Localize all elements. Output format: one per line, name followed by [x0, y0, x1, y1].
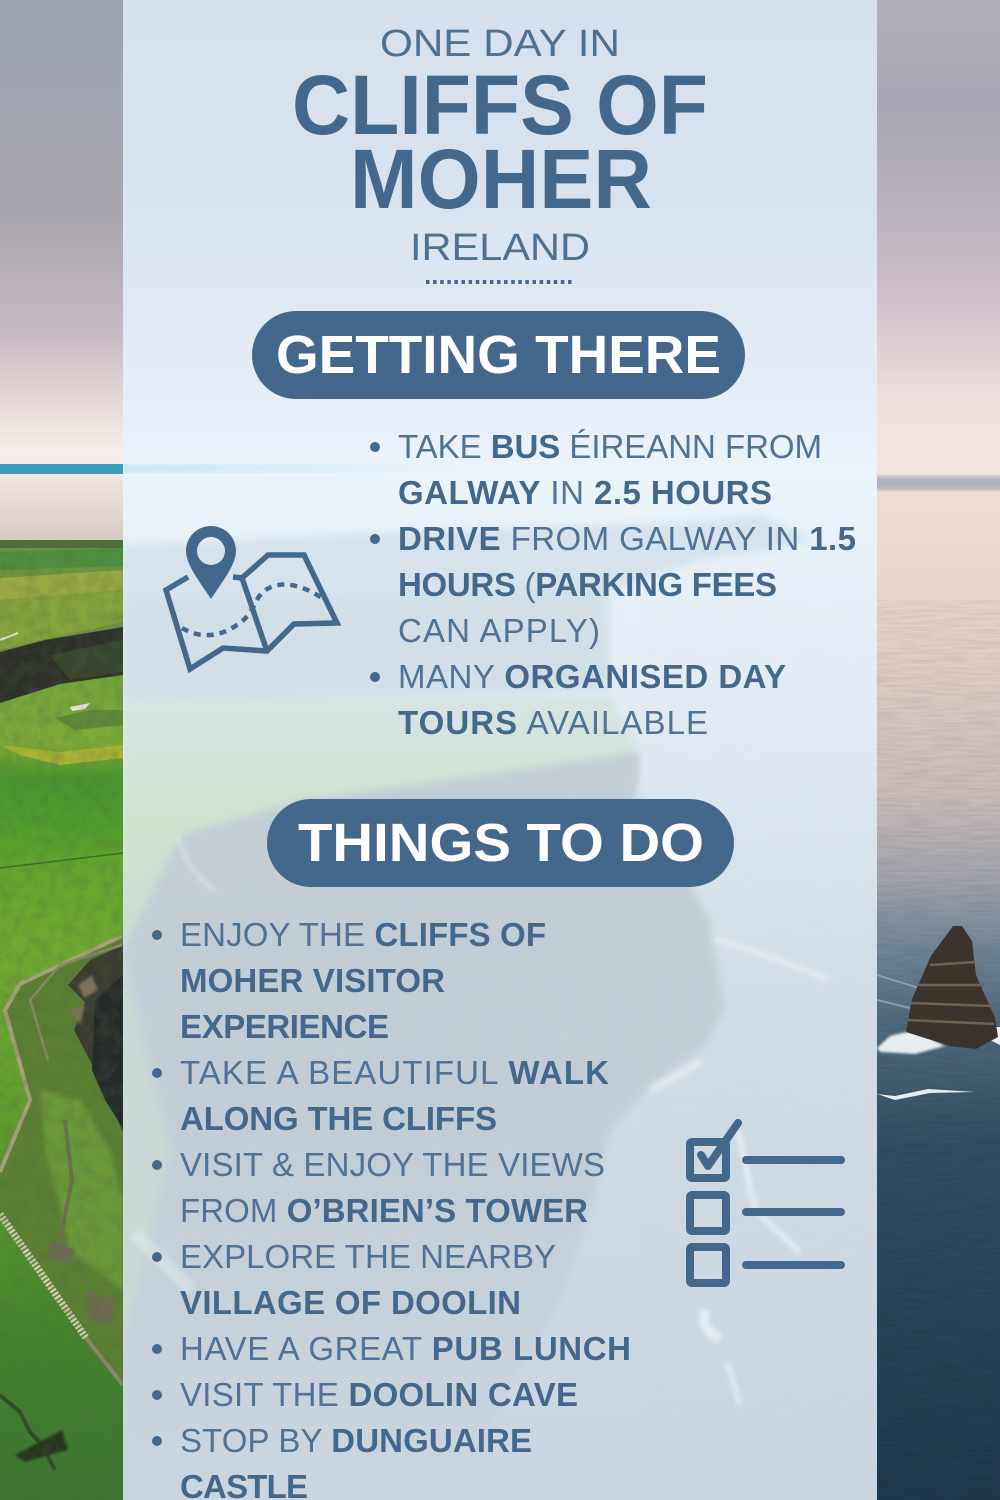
text block: things to do list: EXPLORE THE NEARBY — [180, 1238, 556, 1275]
text block: things to do list: STOP BY DUNGUAIRE — [180, 1422, 532, 1459]
text block: getting there list: MANY ORGANISED DAY — [398, 658, 786, 695]
text block: getting there list: HOURS (PARKING FEES — [398, 566, 777, 603]
text block: getting there list: CAN APPLY) — [398, 612, 600, 649]
right photo strip: sea and sea stack — [877, 0, 1000, 1500]
translucent content panel — [123, 0, 877, 1500]
title: IRELAND — [410, 227, 590, 269]
section heading: things to do — [267, 799, 734, 887]
title: MOHER — [350, 132, 652, 226]
text block: things to do list: MOHER VISITOR — [180, 962, 445, 999]
text block: things to do list: EXPERIENCE — [180, 1008, 389, 1045]
text block: things to do list: VILLAGE OF DOOLIN — [180, 1284, 521, 1321]
text block: things to do list: TAKE A BEAUTIFUL WALK — [180, 1054, 609, 1091]
text block: getting there list: TOURS AVAILABLE — [398, 704, 708, 741]
text block: things to do list: ALONG THE CLIFFS — [180, 1100, 497, 1137]
section heading: getting there: GETTING THERE — [276, 325, 721, 385]
text block: things to do list — [152, 916, 631, 1500]
text block: getting there list: TAKE BUS ÉIREANN FROM — [398, 428, 822, 465]
text block: things to do list: HAVE A GREAT PUB LUNCH — [180, 1330, 631, 1367]
left photo strip: grassy clifftop — [0, 0, 123, 1500]
text block: getting there list: DRIVE FROM GALWAY IN 1.5 — [398, 520, 856, 557]
text block: things to do list: FROM O’BRIEN’S TOWER — [180, 1192, 588, 1229]
icon: checklist — [690, 1123, 841, 1283]
title — [292, 23, 708, 269]
text block: things to do list: VISIT THE DOOLIN CAVE — [180, 1376, 578, 1413]
text block: getting there list — [370, 428, 856, 741]
section heading: things to do: THINGS TO DO — [298, 813, 704, 873]
text block: getting there list: GALWAY IN 2.5 HOURS — [398, 474, 772, 511]
icon: map with location pin — [166, 526, 337, 669]
title: CLIFFS OF — [292, 58, 708, 152]
text block: things to do list: VISIT & ENJOY THE VIEWS — [180, 1146, 605, 1183]
section heading: getting there — [252, 311, 745, 399]
text block: things to do list: ENJOY THE CLIFFS OF — [180, 916, 546, 953]
photo underlay seen through the panel — [123, 229, 877, 1500]
sea stack rock — [906, 926, 998, 1049]
title: ONE DAY IN — [380, 23, 620, 65]
